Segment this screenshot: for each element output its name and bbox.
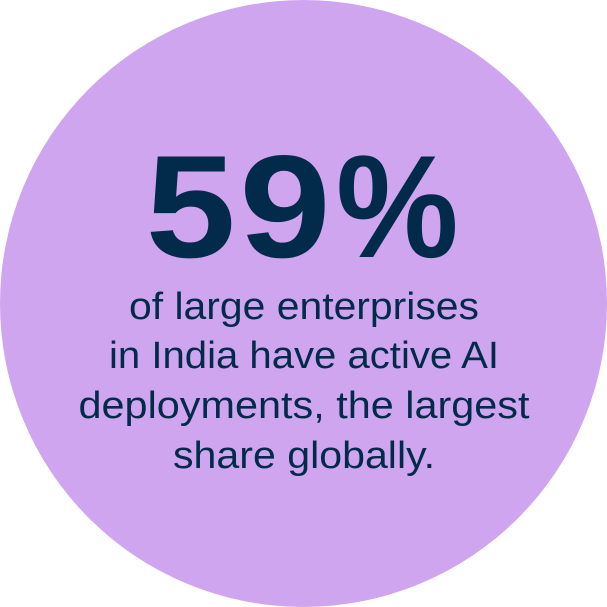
text block: description: share globally. [173, 435, 435, 477]
heading: 59 percent [146, 124, 459, 289]
text block: description: deployments, the largest [78, 385, 530, 427]
text block: description [78, 286, 530, 477]
heading: 59 percent: % [336, 125, 459, 289]
text block: description: of large enterprises [129, 286, 479, 328]
text block: description: in India have active AI [109, 335, 499, 377]
heading: 59 percent: 5 [146, 124, 236, 288]
heading: 59 percent: 9 [239, 125, 331, 288]
